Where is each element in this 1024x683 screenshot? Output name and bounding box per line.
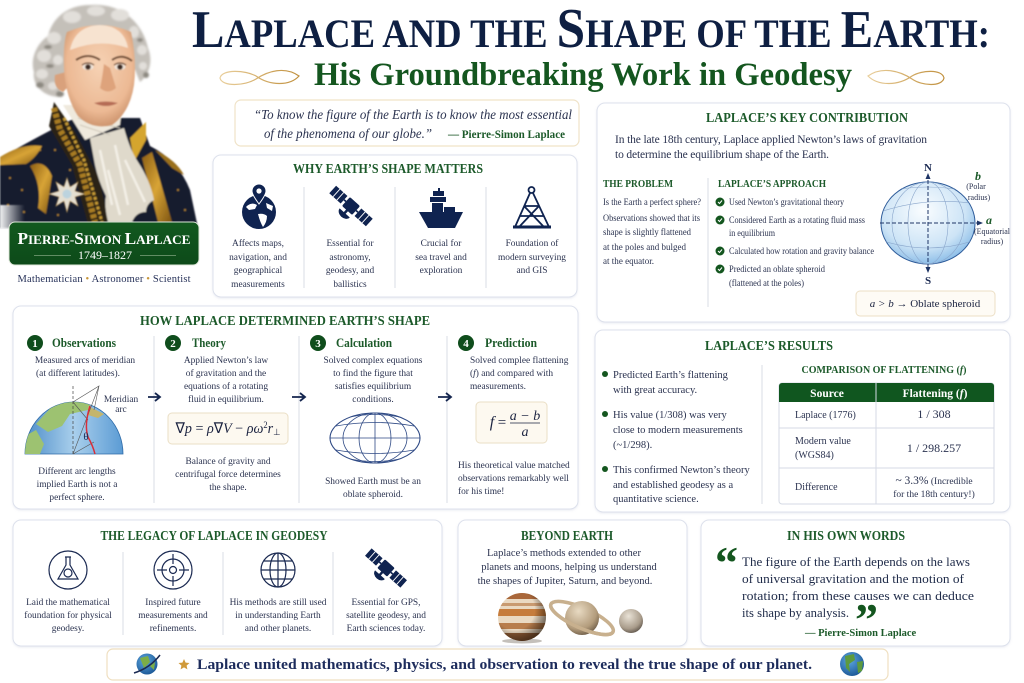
quote mark open: “ — [715, 537, 738, 588]
step 1: observations: perfect sphere. — [49, 492, 105, 503]
text: measurements — [138, 597, 208, 634]
step 1: observations — [25, 335, 138, 503]
heading: WHY EARTH’S SHAPE MATTERS — [293, 162, 483, 177]
text: measurements: measurements and — [138, 611, 208, 621]
equation: r — [268, 421, 273, 437]
callout: a > b — [856, 291, 995, 316]
panel: how Laplace determined Earth's shape — [13, 306, 578, 509]
step 3: calculation: oblate spheroid. — [343, 490, 403, 500]
step 4: prediction: Solved complee flattening — [470, 355, 569, 366]
label: equatorial radius: radius) — [981, 237, 1003, 246]
text: sea travel — [415, 238, 467, 276]
table heading: COMPARISON OF FLATTENING (f) — [802, 365, 967, 376]
name plate — [9, 222, 199, 265]
text: GPS: Essential for GPS, — [351, 597, 421, 608]
icon: ship — [419, 188, 463, 228]
text: astronomy: Essential for — [326, 238, 374, 249]
quote text: of universal gravitation and the motion of — [742, 571, 965, 586]
step 4: prediction: Prediction — [485, 336, 537, 350]
diagram: oblate spheroid with axes: S — [925, 275, 931, 287]
label: meridian arc: arc — [115, 405, 127, 415]
step 2: theory: 2 — [170, 338, 176, 350]
step 2: theory: equations of a rotating — [184, 381, 268, 392]
text: maps — [229, 238, 287, 290]
diagram: oblate spheroid with axes — [880, 162, 983, 287]
diagram: oblate spheroid with axes: N — [924, 162, 932, 174]
panel: Laplace's results — [595, 330, 1010, 512]
the problem: at the poles and bulged — [603, 242, 686, 252]
text: maps: Affects maps, — [232, 238, 284, 249]
text: sea travel: sea travel and — [415, 253, 467, 263]
bullets: quantitative science. — [613, 494, 699, 505]
Laplace's approach — [716, 179, 874, 288]
heading: BEYOND EARTH — [521, 529, 613, 544]
quote text: rotation; from these causes we can deduce — [742, 588, 974, 603]
callout: a > b: a > b → Oblate spheroid — [870, 298, 981, 310]
step 3: calculation: Solved complex equations — [324, 356, 423, 366]
equation: a − b — [510, 409, 540, 424]
opening quote — [235, 100, 579, 146]
comparison table: Flattening (f) — [903, 388, 968, 400]
text: surveying: Foundation of — [506, 238, 559, 249]
text: GPS: Earth sciences today. — [347, 624, 425, 634]
equation — [476, 402, 547, 443]
quote text — [742, 554, 974, 620]
comparison table: Source — [810, 388, 844, 400]
step 2: theory: Balance of gravity and — [185, 456, 271, 467]
icon: globe with orbit — [134, 654, 160, 674]
the problem: shape is slightly flattened — [603, 227, 691, 237]
bullets: and established geodesy as a — [613, 480, 733, 491]
panel: Laplace's key contribution — [597, 103, 1011, 322]
comparison table: 1 / 298.257 — [907, 441, 961, 455]
roles tagline: Mathematician • Astronomer • Scientist — [18, 274, 191, 285]
comparison table: (WGS84) — [795, 450, 834, 461]
bullets: This confirmed Newton’s theory — [613, 465, 751, 476]
heading: THE LEGACY OF LAPLACE IN GEODESY — [100, 529, 328, 544]
step 3: calculation: Showed Earth must be an — [325, 477, 421, 487]
text: methods: in understanding Earth — [235, 611, 321, 621]
icon: flask foundation — [49, 551, 87, 589]
diagram: hemisphere with meridian arc: θ — [83, 431, 89, 443]
text: planets and moons, helping us understand — [481, 562, 658, 573]
life dates: 1749–1827 — [78, 248, 132, 262]
diagram: oblate spheroid grid — [330, 413, 420, 463]
ornament: right flourish — [868, 70, 944, 84]
step 4: prediction: observations remarkably well — [458, 474, 569, 484]
text: astronomy: ballistics — [333, 280, 367, 290]
text: astronomy: geodesy, and — [326, 266, 374, 276]
attribution: — Pierre-Simon Laplace — [804, 628, 917, 639]
text: the shapes of Jupiter, Saturn, and beyond. — [478, 576, 652, 587]
planet: Jupiter — [498, 593, 546, 644]
arrow — [148, 393, 160, 401]
label: equatorial radius: (Equatorial — [974, 227, 1011, 236]
subtitle: His Groundbreaking Work in Geodesy — [314, 57, 852, 93]
opening quote: of the phenomena of our globe.” — [264, 126, 432, 141]
step 2: theory: Theory — [192, 336, 227, 350]
comparison table: for the 18th century!) — [893, 489, 975, 500]
panel: the legacy of Laplace in geodesy — [13, 520, 442, 646]
step 3: calculation: to find the figure that — [333, 368, 413, 379]
bullets: close to modern measurements — [613, 425, 743, 436]
step 4: prediction — [458, 335, 570, 497]
label: meridian arc — [104, 395, 138, 415]
the problem — [603, 179, 701, 266]
opening quote: “To know the figure of the Earth is to know the most essential — [254, 107, 572, 122]
step 4: prediction: His theoretical value matched — [458, 461, 570, 471]
comparison table: Modern value — [795, 436, 851, 447]
comparison table: Difference — [795, 482, 838, 493]
text: maps: measurements — [231, 280, 285, 290]
step 4: prediction: (f) and compared with — [470, 368, 553, 379]
text: GPS: satellite geodesy, and — [346, 611, 426, 621]
step 4: prediction: 4 — [463, 338, 469, 350]
icon: Earth — [840, 652, 864, 676]
text: GPS — [346, 597, 426, 634]
icon: satellite — [323, 185, 373, 233]
text: surveying: modern surveying — [498, 253, 566, 263]
label: equatorial radius: a — [986, 213, 992, 227]
icon: satellite — [359, 548, 408, 594]
heading: IN HIS OWN WORDS — [787, 529, 905, 544]
arrow — [438, 393, 451, 401]
panel: beyond Earth — [458, 520, 687, 646]
text: surveying — [498, 238, 566, 276]
step 3: calculation: satisfies equilibrium — [335, 381, 412, 392]
text — [478, 548, 658, 587]
label: polar radius: radius) — [968, 193, 990, 202]
quote text: The figure of the Earth depends on the laws — [742, 554, 970, 569]
opening quote: — Pierre-Simon Laplace — [447, 127, 566, 141]
icon: target — [154, 551, 192, 589]
diagram: hemisphere with meridian arc — [25, 386, 123, 454]
ornament: left flourish — [220, 70, 299, 84]
comparison table: 1 / 308 — [917, 407, 951, 421]
step 1: observations: implied Earth is not a — [37, 480, 118, 490]
step 3: calculation: 3 — [315, 338, 321, 350]
step 2: theory — [165, 335, 288, 493]
planet: Saturn — [547, 595, 617, 641]
the problem: Observations showed that its — [603, 213, 700, 223]
step 4: prediction: measurements. — [470, 382, 526, 392]
planet: moon — [619, 609, 643, 633]
step 4: prediction: for his time! — [458, 486, 504, 497]
label: meridian arc: Meridian — [104, 395, 138, 405]
banner: conclusion — [107, 649, 888, 680]
text: maps: navigation, and — [229, 253, 287, 263]
name: PIERRE-SIMON LAPLACE — [18, 229, 190, 248]
icon: globe grid — [261, 553, 295, 587]
text: astronomy — [326, 238, 374, 290]
text: measurements: refinements. — [150, 623, 196, 634]
text: maps: geographical — [234, 266, 283, 276]
step 1: observations: Observations — [52, 336, 116, 350]
Laplace's approach: LAPLACE’S APPROACH — [718, 179, 826, 190]
step 3: calculation — [310, 335, 423, 500]
conclusion text: Laplace united mathematics, physics, and observation to reveal the true shape of our planet. — [197, 657, 812, 673]
Laplace's approach: Used Newton’s gravitational theory — [729, 197, 844, 207]
label: equatorial radius — [974, 213, 1011, 246]
heading: LAPLACE’S RESULTS — [705, 339, 833, 354]
intro text: to determine the equilibrium shape of the Earth. — [615, 149, 829, 161]
text: methods — [230, 598, 327, 634]
step 2: theory: of gravitation and the — [186, 368, 266, 379]
the problem: Is the Earth a perfect sphere? — [603, 197, 701, 207]
equation: ⊥ — [273, 427, 281, 437]
text: sea travel: Crucial for — [421, 238, 462, 249]
Laplace's approach: in equilibrium — [729, 228, 775, 238]
equation: f — [490, 414, 497, 431]
portrait of Pierre-Simon Laplace — [0, 5, 205, 229]
text: methods: His methods are still used — [230, 598, 327, 608]
text: foundation: foundation for physical — [24, 610, 112, 621]
icon: globe with pin — [242, 184, 276, 229]
comparison table: Laplace (1776) — [795, 410, 856, 421]
equation — [168, 413, 288, 444]
text: sea travel: exploration — [420, 266, 463, 276]
step 1: observations: (at different latitudes). — [36, 368, 120, 379]
icon: survey tower — [513, 187, 551, 227]
step 3: calculation: Calculation — [336, 336, 392, 350]
bullets — [602, 370, 751, 505]
Laplace's approach: Considered Earth as a rotating fluid mass — [729, 215, 865, 225]
text: methods: and other planets. — [245, 624, 311, 634]
bullets: (~1/298). — [613, 440, 652, 451]
icon: star — [179, 659, 190, 669]
Laplace's approach: Predicted an oblate spheroid — [729, 264, 825, 274]
equation: ∇p = ρ∇V − ρω — [176, 421, 265, 437]
text: foundation: geodesy. — [52, 624, 84, 634]
step 1: observations: Measured arcs of meridian — [35, 355, 135, 366]
intro text — [615, 134, 927, 161]
text: measurements: Inspired future — [145, 597, 201, 608]
step 1: observations: Different arc lengths — [38, 466, 116, 477]
text: foundation: Laid the mathematical — [26, 598, 110, 608]
panel: why Earth's shape matters — [213, 155, 577, 297]
comparison table: ~ 3.3% (Incredible — [895, 475, 973, 487]
label: polar radius — [966, 169, 990, 202]
equation: 2 — [263, 420, 268, 430]
step 1: observations: 1 — [32, 338, 38, 350]
equation: a — [522, 425, 528, 440]
text: foundation — [24, 598, 112, 634]
Laplace's approach: (flattened at the poles) — [729, 278, 804, 288]
quote mark close: ” — [855, 594, 878, 645]
step 2: theory: centrifugal force determines — [175, 469, 281, 480]
step 2: theory: the shape. — [209, 483, 247, 493]
quote text: its shape by analysis. — [742, 605, 849, 620]
heading: LAPLACE’S KEY CONTRIBUTION — [706, 111, 908, 126]
intro text: In the late 18th century, Laplace applied Newton’s laws of gravitation — [615, 134, 927, 146]
step 3: calculation: conditions. — [352, 395, 394, 405]
step 2: theory: fluid in equilibrium. — [188, 394, 264, 405]
equation: = — [498, 415, 506, 431]
bullets: Predicted Earth’s flattening — [613, 370, 729, 381]
the problem: at the equator. — [603, 256, 654, 266]
the problem: THE PROBLEM — [603, 179, 674, 190]
text: Laplace’s methods extended to other — [487, 548, 641, 559]
label: polar radius: (Polar — [966, 182, 986, 191]
heading: HOW LAPLACE DETERMINED EARTH’S SHAPE — [140, 314, 430, 329]
bullets: with great accuracy. — [613, 385, 697, 396]
comparison table — [779, 383, 994, 504]
step 2: theory: Applied Newton’s law — [184, 356, 268, 366]
panel: in his own words — [701, 520, 1010, 646]
label: polar radius: b — [975, 169, 981, 183]
text: astronomy: astronomy, — [329, 253, 371, 263]
text: surveying: and GIS — [516, 266, 548, 276]
bullets: His value (1/308) was very — [613, 410, 727, 421]
Laplace's approach: Calculated how rotation and gravity balance — [729, 246, 874, 256]
arrow — [292, 393, 305, 401]
